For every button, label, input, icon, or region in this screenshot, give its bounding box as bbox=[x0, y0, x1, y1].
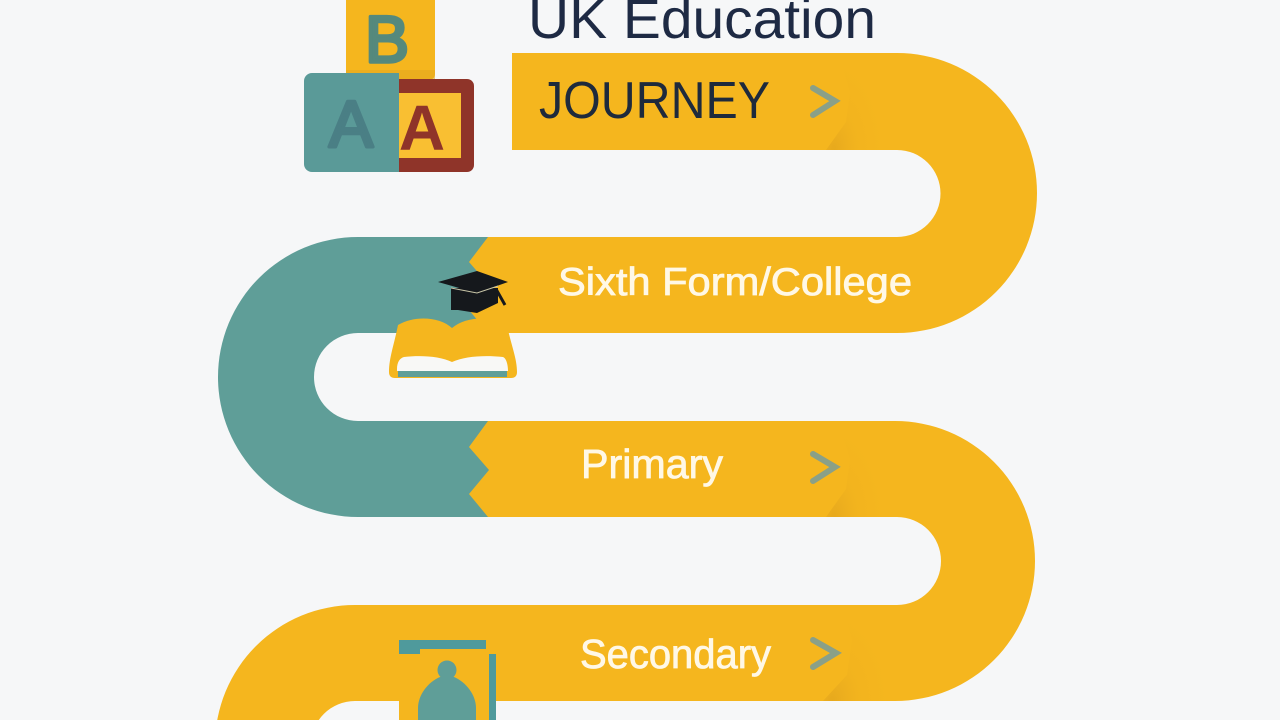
segment: teal curve bbox=[218, 237, 500, 517]
chevron: journey bbox=[813, 88, 835, 115]
label: sixth form/college: Sixth Form/College bbox=[558, 261, 912, 304]
block red A bbox=[385, 79, 474, 172]
segment: top yellow band and curve bbox=[469, 53, 1037, 333]
icon: graduation cap bbox=[438, 271, 508, 313]
chevron: secondary bbox=[813, 640, 836, 667]
icon: secondary school bell bbox=[399, 640, 496, 720]
block red A: A bbox=[399, 92, 445, 164]
icon: open book bbox=[389, 319, 517, 378]
block teal A: A bbox=[329, 87, 373, 161]
chevron: primary bbox=[813, 454, 835, 481]
block B bbox=[346, 0, 435, 80]
fold shading near chevrons bbox=[823, 53, 885, 701]
label: secondary: Secondary bbox=[580, 631, 771, 677]
pathway: winding road bbox=[215, 53, 1037, 720]
heading: journey: JOURNEY bbox=[539, 72, 770, 130]
label: primary: Primary bbox=[581, 441, 724, 487]
segment: middle yellow band and curve bbox=[215, 421, 1035, 720]
block B: B bbox=[365, 2, 409, 76]
icon: alphabet blocks bbox=[304, 0, 474, 172]
block teal A bbox=[304, 73, 399, 172]
